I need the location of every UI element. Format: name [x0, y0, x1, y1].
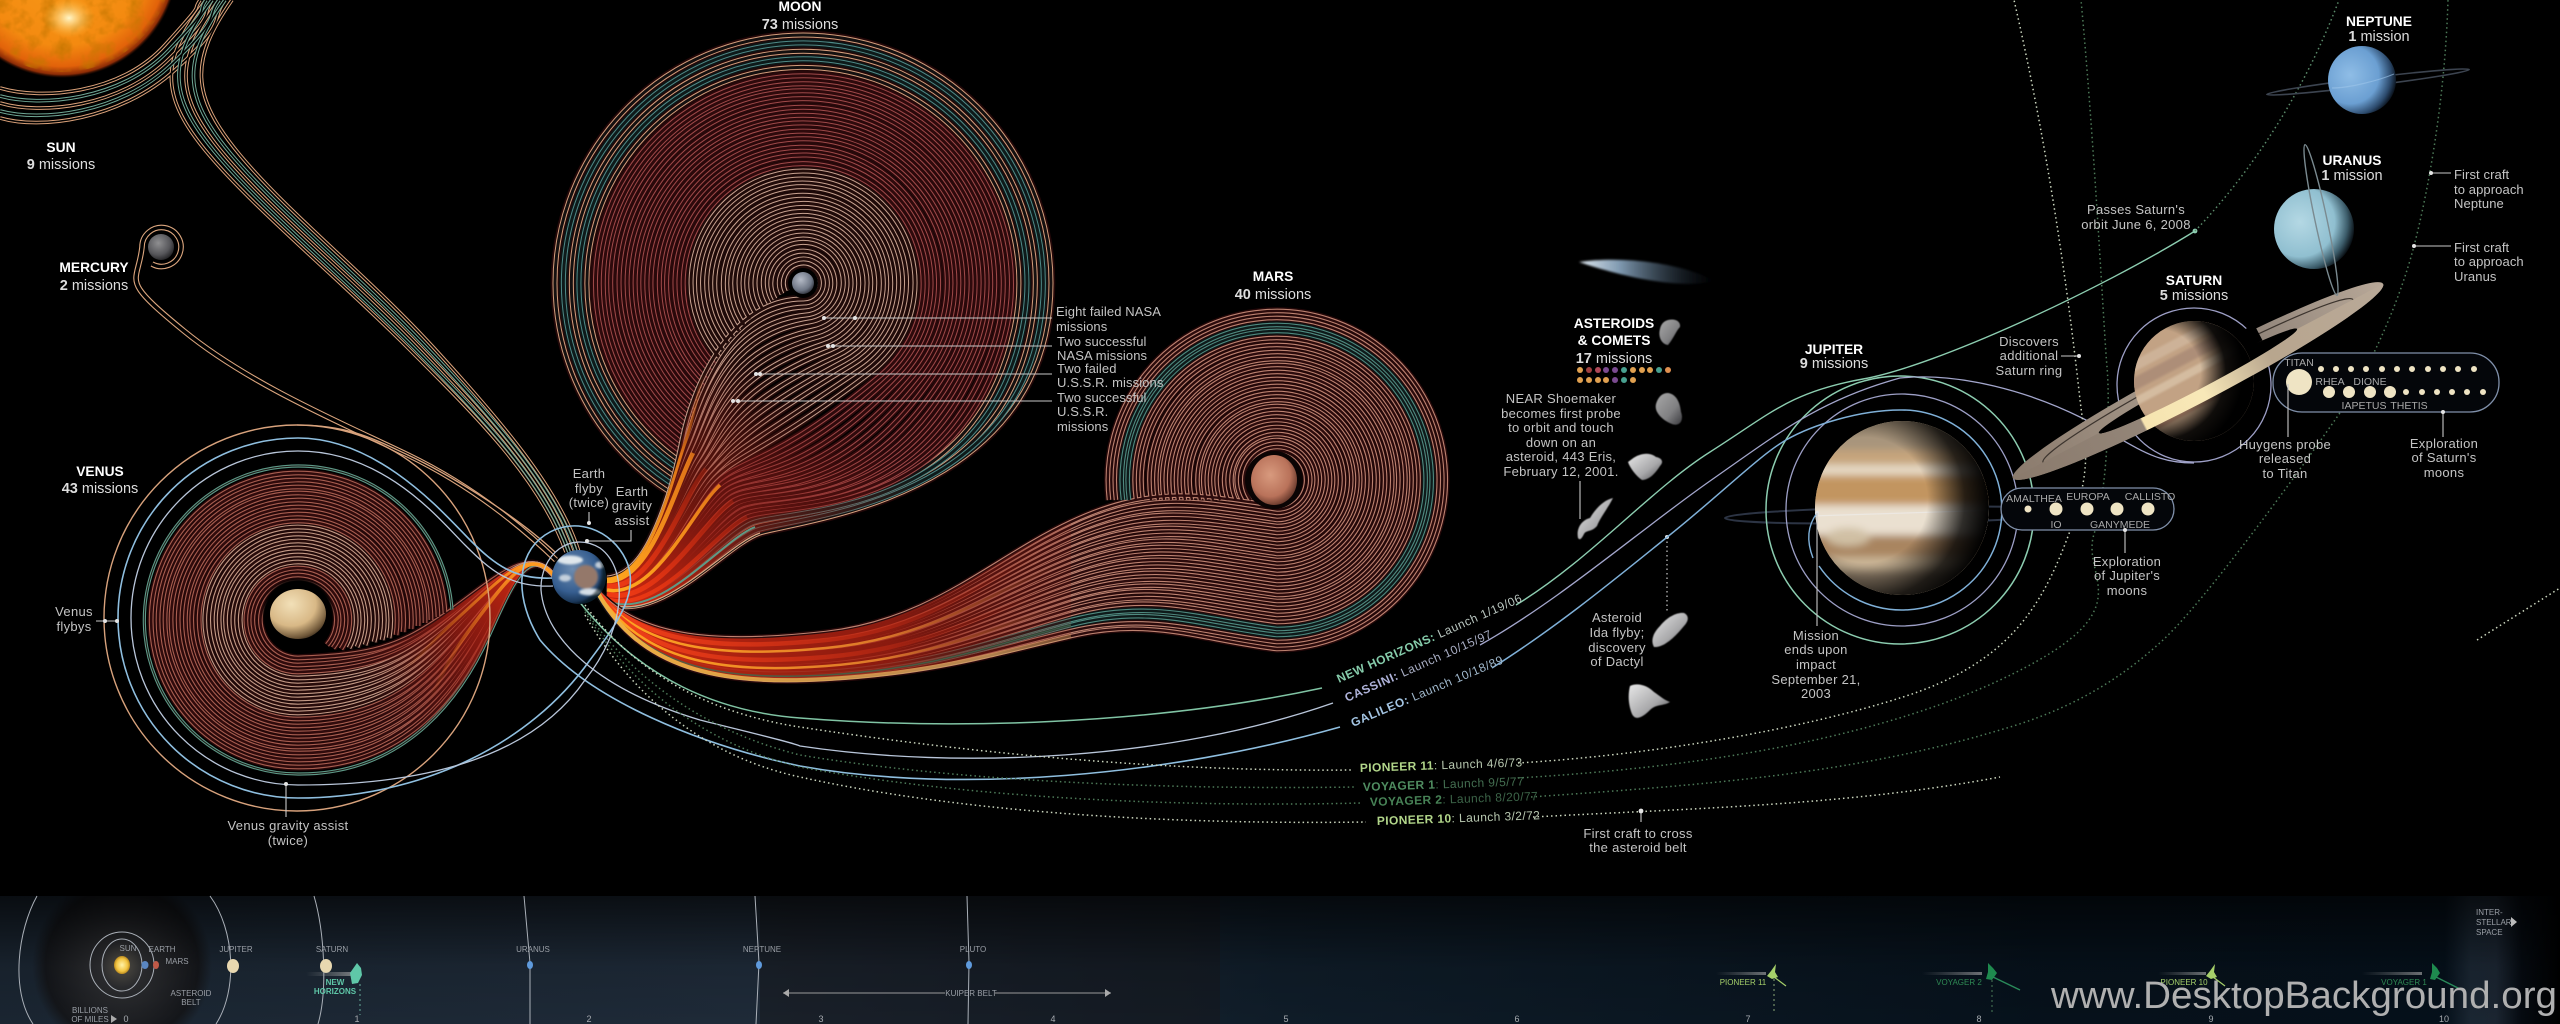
watermark: www.DesktopBackground.org [2050, 975, 2557, 1017]
saturn moons annotation [2410, 410, 2478, 480]
venus bundle highlight [298, 563, 555, 774]
panel: jupiter moons: AMALTHEA [2006, 493, 2062, 505]
ida flyby annotation: Asteroid [1592, 610, 1642, 625]
mission label: galileo: GALILEO: Launch 10/18/89 [1349, 653, 1506, 730]
asteroid annotations: NEAR Shoemaker [1506, 391, 1617, 406]
saturn ring annotation: Saturn ring [1996, 363, 2062, 378]
neptune approach annotation: Neptune [2454, 196, 2504, 211]
venus mission spiral [144, 466, 555, 774]
earth gravity assist label: assist [614, 513, 650, 528]
heading: mercury: MERCURY [59, 260, 129, 275]
kuiper belt: KUIPER BELT [945, 989, 997, 998]
asteroid annotations: asteroid, 443 Eris, [1506, 449, 1616, 464]
mission label: pioneer 10: PIONEER 10: Launch 3/2/72 [1377, 808, 1540, 828]
probe: voyager 1 [2362, 963, 2462, 990]
heading: venus: VENUS [76, 464, 124, 479]
jupiter mission end annotation [1771, 513, 1861, 701]
uranus approach annotation: First craft [2454, 240, 2510, 255]
jupiter moons annotation: of Jupiter's [2094, 568, 2160, 583]
saturn ring annotation: additional [2000, 348, 2058, 363]
jupiter mission end annotation: September 21, [1771, 672, 1861, 687]
jupiter mission end annotation: 2003 [1801, 686, 1831, 701]
panel: saturn moons [2273, 353, 2499, 412]
scale labels: SUN [120, 944, 137, 953]
panel: saturn moons: RHEA [2315, 376, 2345, 388]
mission label: voyager 1: VOYAGER 1: Launch 9/5/77 [1363, 774, 1524, 794]
outer mission dotted trajectories [585, 0, 2560, 822]
ida flyby annotation: Ida flyby; [1589, 625, 1645, 640]
earth [552, 550, 606, 604]
huygens annotation: to Titan [2262, 466, 2308, 481]
mission label: voyager 2: VOYAGER 2: Launch 8/20/77 [1370, 789, 1538, 809]
asteroid annotations: February 12, 2001. [1503, 464, 1619, 479]
moon annotations [731, 304, 1164, 434]
new horizons saturn annotation: Passes Saturn's [2087, 202, 2185, 217]
heading: mars: MARS [1253, 269, 1293, 284]
probe: voyager 2: VOYAGER 2 [1936, 978, 1982, 987]
distance scale numbers: 10 [2439, 1014, 2449, 1024]
panel: saturn moons: DIONE [2353, 376, 2387, 388]
venus annotations [55, 604, 288, 817]
panel: saturn moons: TITAN [2284, 357, 2314, 369]
uranus [2274, 143, 2354, 297]
distance scale numbers: 9 [2208, 1014, 2214, 1024]
sun mission bundle [0, 0, 579, 552]
probe: new horizons: HORIZONS [314, 987, 357, 996]
venus annotations: Venus [55, 604, 93, 619]
distance scale numbers: 6 [1514, 1014, 1520, 1024]
moon annotations: missions [1056, 319, 1108, 334]
mercury missions [136, 227, 556, 560]
earth annotations: Earth [573, 466, 605, 481]
scale labels: MARS [165, 957, 189, 966]
pioneer 10 annotation: the asteroid belt [1589, 840, 1687, 855]
venus annotations: flybys [56, 619, 92, 634]
jupiter moons annotation: moons [2107, 583, 2147, 598]
scale labels: OF MILES [71, 1015, 109, 1024]
saturn with rings [2012, 282, 2384, 480]
earth annotations: (twice) [569, 495, 609, 510]
probe: pioneer 10 [2158, 964, 2225, 987]
scale labels: NEPTUNE [743, 945, 781, 954]
interstellar space label [2476, 908, 2517, 937]
jupiter mission end annotation: ends upon [1784, 642, 1848, 657]
distance scale numbers: 1 [354, 1014, 360, 1024]
heading: uranus: 1 mission [2321, 168, 2383, 184]
solar system orbits [19, 896, 969, 1024]
ida flyby annotation: of Dactyl [1590, 654, 1644, 669]
probe: new horizons: NEW [326, 978, 345, 987]
ida flyby annotation [1588, 535, 1669, 669]
venus gravity assist label: (twice) [268, 833, 308, 848]
neptune approach annotation: to approach [2454, 182, 2524, 197]
panel: jupiter moons: EUROPA [2066, 491, 2110, 503]
venus [263, 579, 333, 649]
moon annotations: Two successful [1057, 334, 1147, 349]
mission label: cassini: CASSINI: Launch 10/15/97 [1343, 627, 1494, 705]
earth annotations: flyby [575, 481, 603, 496]
distance scale numbers: 5 [1283, 1014, 1289, 1024]
scale labels: PLUTO [960, 945, 986, 954]
moon annotations: U.S.S.R. [1057, 404, 1108, 419]
moon annotations: Two successful [1057, 390, 1147, 405]
asteroid annotations: down on an [1526, 435, 1596, 450]
asteroid annotations: becomes first probe [1501, 406, 1621, 421]
icon: comet [1579, 260, 1715, 284]
jupiter mission end annotation: impact [1796, 657, 1836, 672]
panel: distance scale strip [0, 896, 2540, 1024]
distance scale numbers: 8 [1976, 1014, 1982, 1024]
huygens annotation: Huygens probe [2239, 437, 2331, 452]
scale labels: URANUS [516, 945, 550, 954]
scale labels: EARTH [149, 945, 176, 954]
saturn moons annotation: moons [2424, 465, 2464, 480]
probe: pioneer 11 [1716, 964, 1786, 1013]
panel: saturn moons: IAPETUS [2342, 400, 2386, 412]
moon annotations: U.S.S.R. missions [1057, 375, 1164, 390]
pioneer 10 annotation: First craft to cross [1583, 826, 1693, 841]
neptune [2266, 46, 2470, 114]
heading: jupiter: JUPITER [1805, 342, 1863, 357]
saturn moons annotation: of Saturn's [2411, 450, 2477, 465]
probe: voyager 1: VOYAGER 1 [2381, 978, 2427, 987]
interstellar space label: SPACE [2476, 928, 2503, 937]
scale labels: JUPITER [219, 945, 253, 954]
heading: neptune: NEPTUNE [2346, 14, 2412, 29]
jupiter [1724, 421, 2004, 595]
asteroid annotations [1501, 391, 1621, 519]
panel: saturn moons: THETIS [2390, 400, 2428, 412]
panel: jupiter moons: IO [2050, 519, 2062, 531]
scale labels: BELT [181, 998, 201, 1007]
icons: asteroids [1578, 319, 1688, 718]
neptune approach annotation [2429, 167, 2524, 211]
venus gravity assist label: Venus gravity assist [228, 818, 349, 833]
heading: saturn: 5 missions [2160, 288, 2228, 304]
distance scale numbers: 4 [1050, 1014, 1056, 1024]
heading: uranus: URANUS [2322, 153, 2382, 168]
jupiter orbit rings [1480, 229, 2197, 668]
uranus approach annotation: Uranus [2454, 269, 2497, 284]
saturn ring annotation [1996, 334, 2081, 378]
mission label: new horizons: NEW HORIZONS: Launch 1/19/06 [1335, 591, 1524, 686]
huygens annotation [2239, 384, 2331, 481]
moon annotations: missions [1057, 419, 1109, 434]
heading: jupiter: 9 missions [1800, 356, 1868, 372]
distance scale numbers: 2 [586, 1014, 592, 1024]
heading: sun: SUN [46, 140, 76, 155]
neptune approach annotation: First craft [2454, 167, 2510, 182]
jupiter moons annotation [2093, 528, 2161, 598]
earth annotations [569, 466, 631, 543]
scale labels: BILLIONS [72, 1006, 108, 1015]
heading: sun: 9 missions [27, 157, 95, 173]
probe: new horizons [306, 963, 362, 1015]
distance scale numbers [123, 1014, 2449, 1024]
uranus approach annotation [2412, 240, 2524, 284]
huygens annotation: released [2259, 451, 2311, 466]
jupiter mission end annotation: Mission [1793, 628, 1839, 643]
probe: voyager 2 [1922, 963, 2020, 1013]
moon [788, 268, 818, 298]
moon annotations: NASA missions [1057, 348, 1148, 363]
probe: pioneer 10: PIONEER 10 [2160, 978, 2208, 987]
heading: venus: 43 missions [62, 481, 138, 497]
mission label: pioneer 11: PIONEER 11: Launch 4/6/73 [1360, 755, 1523, 775]
heading: neptune: 1 mission [2348, 29, 2410, 45]
mars bundle highlight [597, 522, 1071, 680]
panel: jupiter moons [2001, 488, 2175, 531]
probe: pioneer 11: PIONEER 11 [1720, 978, 1767, 987]
panel: jupiter moons: GANYMEDE [2090, 519, 2150, 531]
heading: asteroids and comets: & COMETS [1578, 333, 1650, 348]
scale labels: SATURN [316, 945, 348, 954]
pioneer 10 annotation [1583, 809, 1693, 855]
saturn ring annotation: Discovers [1999, 334, 2059, 349]
heading: asteroids and comets: 17 missions [1576, 351, 1652, 367]
distance scale numbers: 7 [1745, 1014, 1751, 1024]
mars mission spiral [597, 311, 1446, 680]
asteroid annotations: to orbit and touch [1508, 420, 1614, 435]
heading: saturn: SATURN [2166, 273, 2222, 288]
interstellar space label: STELLAR [2476, 918, 2512, 927]
scale labels [71, 944, 986, 1024]
kuiper belt [783, 989, 1111, 998]
interstellar space label: INTER- [2476, 908, 2503, 917]
earth gravity assist label: gravity [612, 498, 652, 513]
scale labels: ASTEROID [171, 989, 212, 998]
moon annotations: Two failed [1057, 361, 1117, 376]
asteroid mission dots [1577, 367, 1671, 383]
distance scale numbers: 0 [123, 1014, 129, 1024]
heading: mars: 40 missions [1235, 287, 1311, 303]
heading: moon: 73 missions [762, 17, 838, 33]
moon annotations: Eight failed NASA [1056, 304, 1161, 319]
panel: jupiter moons: CALLISTO [2125, 491, 2175, 503]
venus outer orbit rings [104, 425, 1340, 811]
earth gravity assist label: Earth [616, 484, 648, 499]
moon bundle highlight [607, 283, 1051, 607]
moon mission spiral [555, 35, 1051, 607]
saturn moons annotation: Exploration [2410, 436, 2478, 451]
new horizons saturn annotation: orbit June 6, 2008 [2081, 217, 2191, 232]
uranus approach annotation: to approach [2454, 254, 2524, 269]
scale planets [114, 956, 972, 974]
distance scale numbers: 3 [818, 1014, 824, 1024]
heading: asteroids and comets: ASTEROIDS [1574, 316, 1654, 331]
heading: mercury: 2 missions [60, 278, 128, 294]
sun [0, 0, 178, 78]
ida flyby annotation: discovery [1588, 640, 1646, 655]
mars [1245, 451, 1303, 509]
jupiter moons annotation: Exploration [2093, 554, 2161, 569]
